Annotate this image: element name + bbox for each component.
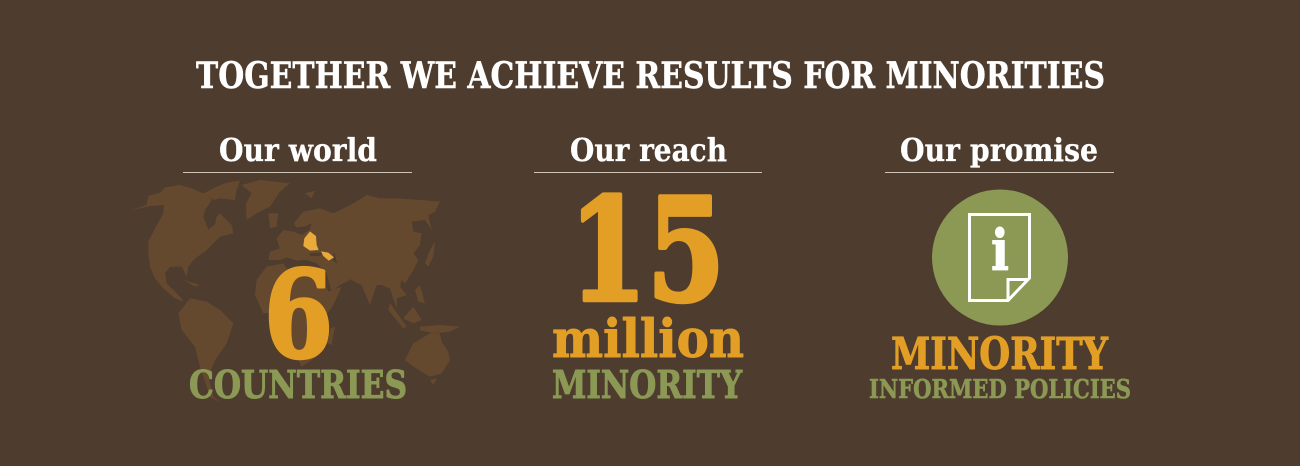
heading: our world: Our world	[219, 131, 377, 169]
label: countries: COUNTRIES	[189, 362, 407, 407]
icon: information document: i	[991, 218, 1009, 284]
world map	[130, 180, 460, 403]
icon: information document	[932, 190, 1068, 326]
heading: our reach: Our reach	[570, 131, 727, 169]
highlighted countries	[303, 231, 334, 261]
label: informed policies: INFORMED POLICIES	[869, 375, 1131, 405]
label: minority: MINORITY	[891, 329, 1108, 380]
label: minority: MINORITY	[552, 362, 743, 407]
panel: our reach	[534, 131, 762, 407]
statistic unit: million: million	[552, 309, 744, 370]
statistic: 15: 15	[569, 168, 725, 334]
panel: our promise	[869, 131, 1131, 405]
statistic: 6: 6	[264, 245, 333, 386]
title: TOGETHER WE ACHIEVE RESULTS FOR MINORITIES	[196, 55, 1105, 97]
heading: our promise: Our promise	[900, 131, 1098, 169]
panel: our world	[130, 131, 460, 407]
